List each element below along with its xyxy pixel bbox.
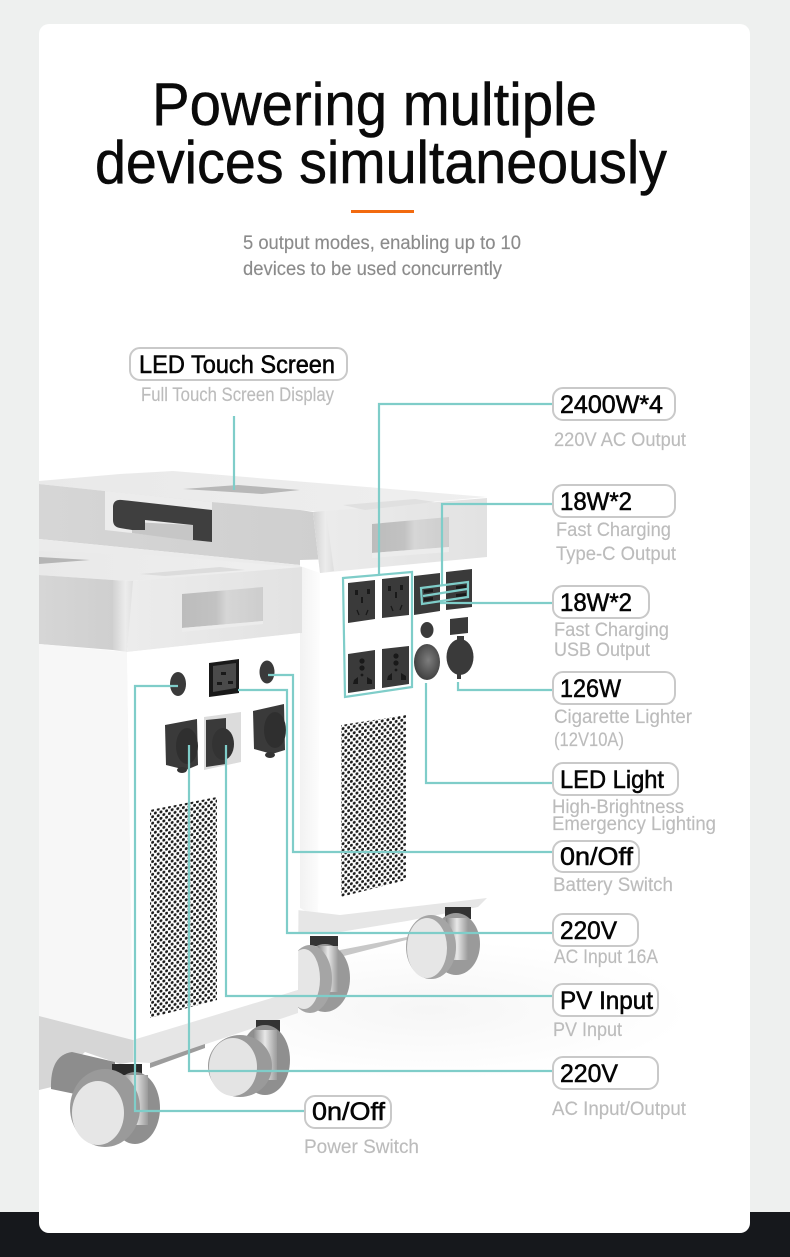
left AC socket — [165, 719, 198, 773]
callout: 220V AC input: AC Input 16A — [554, 947, 658, 968]
back unit skirt — [297, 898, 487, 957]
callout: power switch: 0n/Off — [312, 1098, 385, 1126]
callout: 18W*2 Type-C — [553, 485, 677, 565]
USB and Type-C panels — [414, 569, 472, 615]
line: USB — [440, 602, 553, 604]
callout: 2400W*4: 2400W*4 — [560, 391, 663, 419]
callout: LED Light: LED Light — [560, 766, 664, 794]
callout: battery switch: 0n/Off — [560, 843, 633, 871]
back unit handle recess — [372, 517, 449, 553]
back unit vent — [341, 715, 406, 897]
line: AC output with socket bracket — [343, 404, 553, 697]
callout: 18W*2 USB — [553, 586, 669, 661]
back unit front cap — [313, 498, 487, 573]
callout: 18W*2 Type-C: Type-C Output — [556, 544, 677, 565]
line: LED light — [426, 683, 553, 783]
back unit carry handle — [105, 491, 212, 542]
dark footer band — [0, 1212, 790, 1257]
back unit top surface — [39, 471, 487, 512]
front unit front wheel — [51, 1052, 160, 1147]
callout: 126W: (12V10A) — [554, 730, 624, 751]
AC inlet — [209, 659, 239, 697]
power switch — [170, 672, 186, 696]
line: PV input — [226, 745, 553, 996]
callout: LED Light: High-Brightness — [552, 797, 684, 818]
line: power switch — [135, 686, 305, 1111]
callout: PV Input: PV Input — [553, 1020, 623, 1041]
back unit right wheel — [406, 907, 480, 979]
front unit side body — [39, 644, 133, 1040]
front unit left cap — [39, 575, 113, 650]
callout: power switch — [304, 1096, 419, 1158]
callout: LED Touch Screen — [130, 348, 347, 406]
callout: PV Input — [553, 984, 658, 1041]
callout: 220V AC input/output: 220V — [560, 1060, 618, 1088]
callout: LED Touch Screen: Full Touch Screen Display — [141, 385, 334, 406]
floor shadow — [170, 940, 690, 1080]
callout: 18W*2 USB: 18W*2 — [560, 589, 632, 617]
callout: 18W*2 USB: USB Output — [554, 640, 651, 661]
front unit front body — [127, 633, 300, 1040]
product illustration: two power stations — [39, 471, 487, 1147]
back unit screen recess — [183, 485, 300, 494]
line: cigarette lighter — [458, 682, 553, 690]
PV input socket — [204, 712, 241, 770]
callout: 220V AC input: 220V — [560, 917, 617, 945]
line: battery switch — [268, 675, 553, 852]
front unit cap corner — [113, 580, 134, 652]
back unit underside strip — [39, 539, 300, 575]
front unit rear wheel — [208, 1020, 290, 1097]
back unit — [39, 471, 487, 1013]
AC sockets — [348, 576, 409, 693]
front unit top surface — [39, 551, 300, 581]
callout: 18W*2 Type-C: Fast Charging — [556, 520, 671, 541]
callout: 2400W*4: 220V AC Output — [554, 430, 687, 451]
line: Type-C with port bracket — [421, 504, 553, 604]
subtitle — [243, 233, 521, 280]
cigarette lighter socket — [446, 636, 474, 679]
callout: battery switch — [553, 841, 673, 896]
back unit body — [300, 555, 487, 915]
callout: 126W: 126W — [560, 675, 621, 703]
line: touch screen — [233, 416, 235, 490]
callout: 220V AC input — [553, 914, 658, 968]
battery switch — [260, 660, 274, 684]
callout: power switch: Power Switch — [304, 1137, 419, 1158]
line: AC input/output — [189, 745, 553, 1071]
right AC socket — [253, 704, 286, 758]
title — [95, 71, 667, 196]
callout: 18W*2 USB: Fast Charging — [554, 620, 669, 641]
subtitle: devices to be used concurrently — [243, 259, 502, 280]
back unit left wheel — [288, 936, 350, 1013]
LED lamp — [414, 644, 440, 680]
small indicator button and switch — [420, 617, 468, 638]
leader lines — [135, 404, 553, 1111]
callout: 126W — [553, 672, 693, 751]
callout: LED Light — [552, 763, 716, 835]
callout: 220V AC input/output — [552, 1057, 687, 1120]
front unit front cap — [127, 567, 302, 652]
callout: 18W*2 Type-C: 18W*2 — [560, 488, 632, 516]
callout: LED Touch Screen: LED Touch Screen — [139, 351, 335, 379]
callout: LED Light: Emergency Lighting — [552, 814, 716, 835]
title: devices simultaneously — [95, 129, 667, 196]
subtitle: 5 output modes, enabling up to 10 — [243, 233, 521, 254]
title: Powering multiple — [152, 71, 597, 138]
callout: battery switch: Battery Switch — [553, 875, 673, 896]
callout: 220V AC input/output: AC Input/Output — [552, 1099, 687, 1120]
front unit handle recess — [182, 587, 263, 628]
callout: 2400W*4 — [553, 388, 687, 451]
orange accent rule — [351, 210, 414, 213]
front unit — [39, 551, 302, 1147]
callout: 126W: Cigarette Lighter — [554, 707, 693, 728]
callout: PV Input: PV Input — [560, 987, 653, 1015]
back unit side cap — [39, 484, 320, 573]
front unit skirt — [39, 990, 298, 1090]
front unit vent — [150, 797, 217, 1018]
line: AC input — [238, 690, 553, 933]
